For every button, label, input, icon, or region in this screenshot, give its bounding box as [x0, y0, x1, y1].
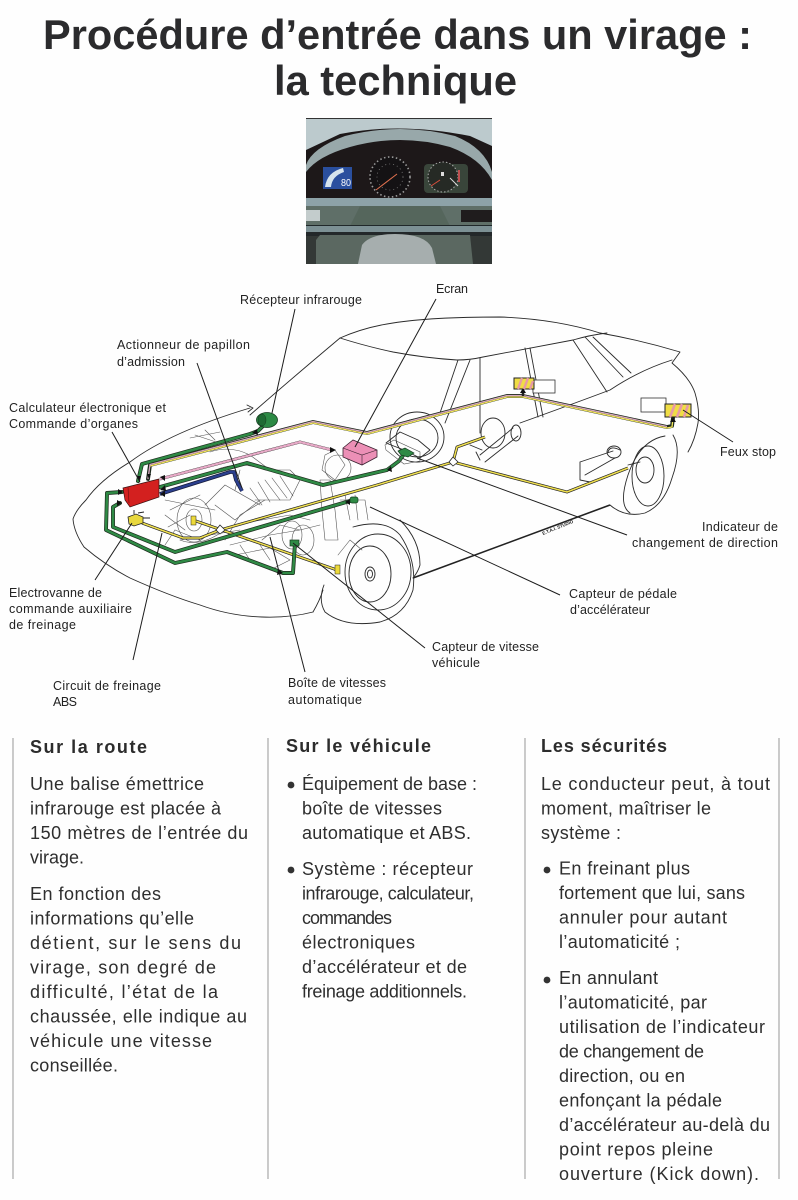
label: Actionneur de papillon d'admission: Actionneur de papillon: [117, 338, 250, 352]
bullet: en annulant: d’accélérateur au-delà du: [559, 1115, 770, 1135]
label: Electrovanne de commande auxiliaire de freinage: commande auxiliaire: [9, 602, 132, 616]
rear axle: [470, 418, 640, 482]
paragraph: recommended speed: chaussée, elle indique au: [30, 1006, 247, 1026]
bullet: en freinant: l’automaticité ;: [559, 932, 680, 952]
panel: Sur la route: [30, 737, 248, 1076]
label: Calculateur électronique et Commande d'organes: [9, 401, 167, 431]
label: Capteur de vitesse véhicule: [432, 640, 539, 670]
wire: blue throttle actuator circuit: [160, 472, 242, 494]
label: Actionneur de papillon d'admission: [117, 338, 250, 369]
title: [43, 11, 752, 104]
paragraph: beacon: Une balise émettrice: [30, 774, 204, 794]
label: Circuit de freinage ABS: ABS: [53, 695, 77, 709]
steering wheel: [386, 412, 444, 462]
label: Feux stop: Feux stop: [720, 445, 776, 459]
engine and gearbox line art: [165, 430, 368, 570]
paragraph: driver control: moment, maîtriser le: [541, 798, 711, 818]
bullet: équipement de base: automatique et ABS.: [302, 823, 471, 843]
paragraph: recommended speed: détient, sur le sens du: [30, 933, 241, 953]
wire: yellow sensor and turn-signal circuit: [142, 437, 628, 574]
icon: green accelerator pedal connector: [385, 440, 420, 464]
paragraph: beacon: [30, 774, 248, 868]
paragraph: beacon: virage.: [30, 848, 84, 868]
wire: pink and yellow stop-light circuit: [148, 389, 673, 479]
label: Circuit de freinage ABS: [53, 679, 161, 709]
bullet: système: Système : récepteur: [302, 859, 473, 879]
paragraph: recommended speed: [30, 884, 247, 1076]
paragraph: driver control: système :: [541, 823, 621, 843]
label: Capteur de pédale d'accélérateur: Capteur de pédale: [569, 587, 677, 601]
icon: blue speed display showing 80: 80: [341, 178, 351, 189]
label: Récepteur infrarouge: Récepteur infrarouge: [240, 293, 362, 307]
label: Ecran: Ecran: [436, 282, 468, 296]
icon: arrowheads on wires: [117, 388, 676, 575]
icon: green infrared receiver: [256, 412, 278, 428]
icon: rev counter and gauges: [424, 162, 468, 193]
wire: green accelerator circuit: [160, 454, 404, 487]
label: Capteur de vitesse véhicule: véhicule: [432, 656, 480, 670]
panel: Sur le véhicule: [286, 736, 477, 1002]
panel: Les sécurités: [541, 736, 770, 1184]
bullet: système: commandes: [302, 908, 392, 928]
paragraph: recommended speed: conseillée.: [30, 1056, 118, 1076]
label: Electrovanne de commande auxiliaire de freinage: [9, 586, 132, 632]
bullet: système: freinage additionnels.: [302, 982, 467, 1002]
bullet: système: [288, 859, 474, 1002]
label: Capteur de vitesse véhicule: Capteur de vitesse: [432, 640, 539, 654]
bullet: en annulant: direction, ou en: [559, 1066, 685, 1086]
rear wheel: [610, 435, 677, 514]
paragraph: driver control: [541, 774, 770, 843]
bullet: système: électroniques: [302, 932, 415, 952]
bullet: système: infrarouge, calculateur,: [302, 884, 474, 904]
label: Electrovanne de commande auxiliaire de freinage: de freinage: [9, 618, 76, 632]
bullet: équipement de base: [288, 774, 477, 843]
diagram: car with guidance system wiring: [9, 282, 778, 709]
icon: right stop light: [641, 398, 691, 417]
photo: dashboard with speed display: [306, 118, 492, 264]
paragraph: beacon: 150 mètres de l’entrée du: [30, 823, 248, 843]
paragraph: beacon: infrarouge est placée à: [30, 798, 222, 818]
label: Circuit de freinage ABS: Circuit de freinage: [53, 679, 161, 693]
icon: pink screen unit: [343, 440, 377, 465]
heading: Sur la route: Sur la route: [30, 737, 147, 757]
icon: speedometer: [370, 157, 410, 197]
bullet: en freinant: En freinant plus: [559, 858, 690, 878]
leader lines: [95, 299, 733, 672]
bullet: en annulant: En annulant: [559, 968, 658, 988]
label: Indicateur de changement de direction: [632, 520, 778, 550]
icon: blue speed display showing 80: [323, 167, 352, 189]
paragraph: recommended speed: véhicule une vitesse: [30, 1031, 212, 1051]
car body outline: E.T.A.I. STUDIO: [542, 519, 574, 536]
heading: Les sécurités: Les sécurités: [541, 736, 667, 756]
icon: green connector on gearbox: [290, 497, 358, 546]
paragraph: recommended speed: informations qu’elle: [30, 908, 194, 928]
bullet: en annulant: l’automaticité, par: [559, 992, 707, 1012]
title: Procédure d’entrée dans un virage :: [43, 11, 752, 58]
paragraph: driver control: Le conducteur peut, à tout: [541, 774, 770, 794]
wire: green circuit to infrared receiver: [138, 424, 265, 481]
label: Boîte de vitesses automatique: [288, 676, 386, 707]
label: Electrovanne de commande auxiliaire de freinage: Electrovanne de: [9, 586, 102, 600]
label: Boîte de vitesses automatique: automatique: [288, 693, 362, 707]
bullet: en annulant: utilisation de l’indicateur: [559, 1017, 765, 1037]
label: Capteur de pédale d'accélérateur: d’accélérateur: [570, 603, 650, 617]
label: Boîte de vitesses automatique: Boîte de vitesses: [288, 676, 386, 690]
bullet: en annulant: de changement de: [559, 1042, 704, 1062]
icon: yellow auxiliary brake solenoid valve: [128, 510, 150, 526]
title: la technique: [274, 57, 517, 104]
column dividers: [13, 738, 779, 1179]
bullet: équipement de base: Équipement de base :: [302, 774, 477, 794]
paragraph: recommended speed: En fonction des: [30, 884, 161, 904]
label: Capteur de pédale d'accélérateur: [569, 587, 677, 617]
bullet: système: d’accélérateur et de: [302, 957, 467, 977]
bullet: en annulant: [544, 968, 770, 1184]
wire: pink circuit to screen: [160, 442, 332, 479]
icon: red electronic control unit: [123, 479, 159, 507]
label: Actionneur de papillon d'admission: d’admission: [117, 355, 185, 369]
bullet: en annulant: enfonçant la pédale: [559, 1090, 722, 1110]
bullet: en freinant: [544, 858, 745, 952]
heading: Sur le véhicule: Sur le véhicule: [286, 736, 431, 756]
label: Calculateur électronique et Commande d'organes: Commande d’organes: [9, 417, 138, 431]
icon: left stop light: [514, 378, 555, 393]
label: Indicateur de changement de direction: Indicateur de: [702, 520, 778, 534]
label: Calculateur électronique et Commande d'organes: Calculateur électronique et: [9, 401, 167, 415]
car body outline: [73, 317, 699, 617]
bullet: en freinant: annuler pour autant: [559, 908, 727, 928]
front wheel: [321, 524, 414, 624]
paragraph: recommended speed: difficulté, l’état de la: [30, 982, 219, 1002]
paragraph: recommended speed: virage, son degré de: [30, 958, 216, 978]
label: Indicateur de changement de direction: changement de direction: [632, 536, 778, 550]
bullet: équipement de base: boîte de vitesses: [302, 798, 442, 818]
wire: green ABS brake circuits: [106, 492, 353, 573]
bullet: en annulant: point repos pleine: [559, 1140, 713, 1160]
bullet: en annulant: ouverture (Kick down).: [559, 1164, 759, 1184]
bullet: en freinant: fortement que lui, sans: [559, 883, 745, 903]
